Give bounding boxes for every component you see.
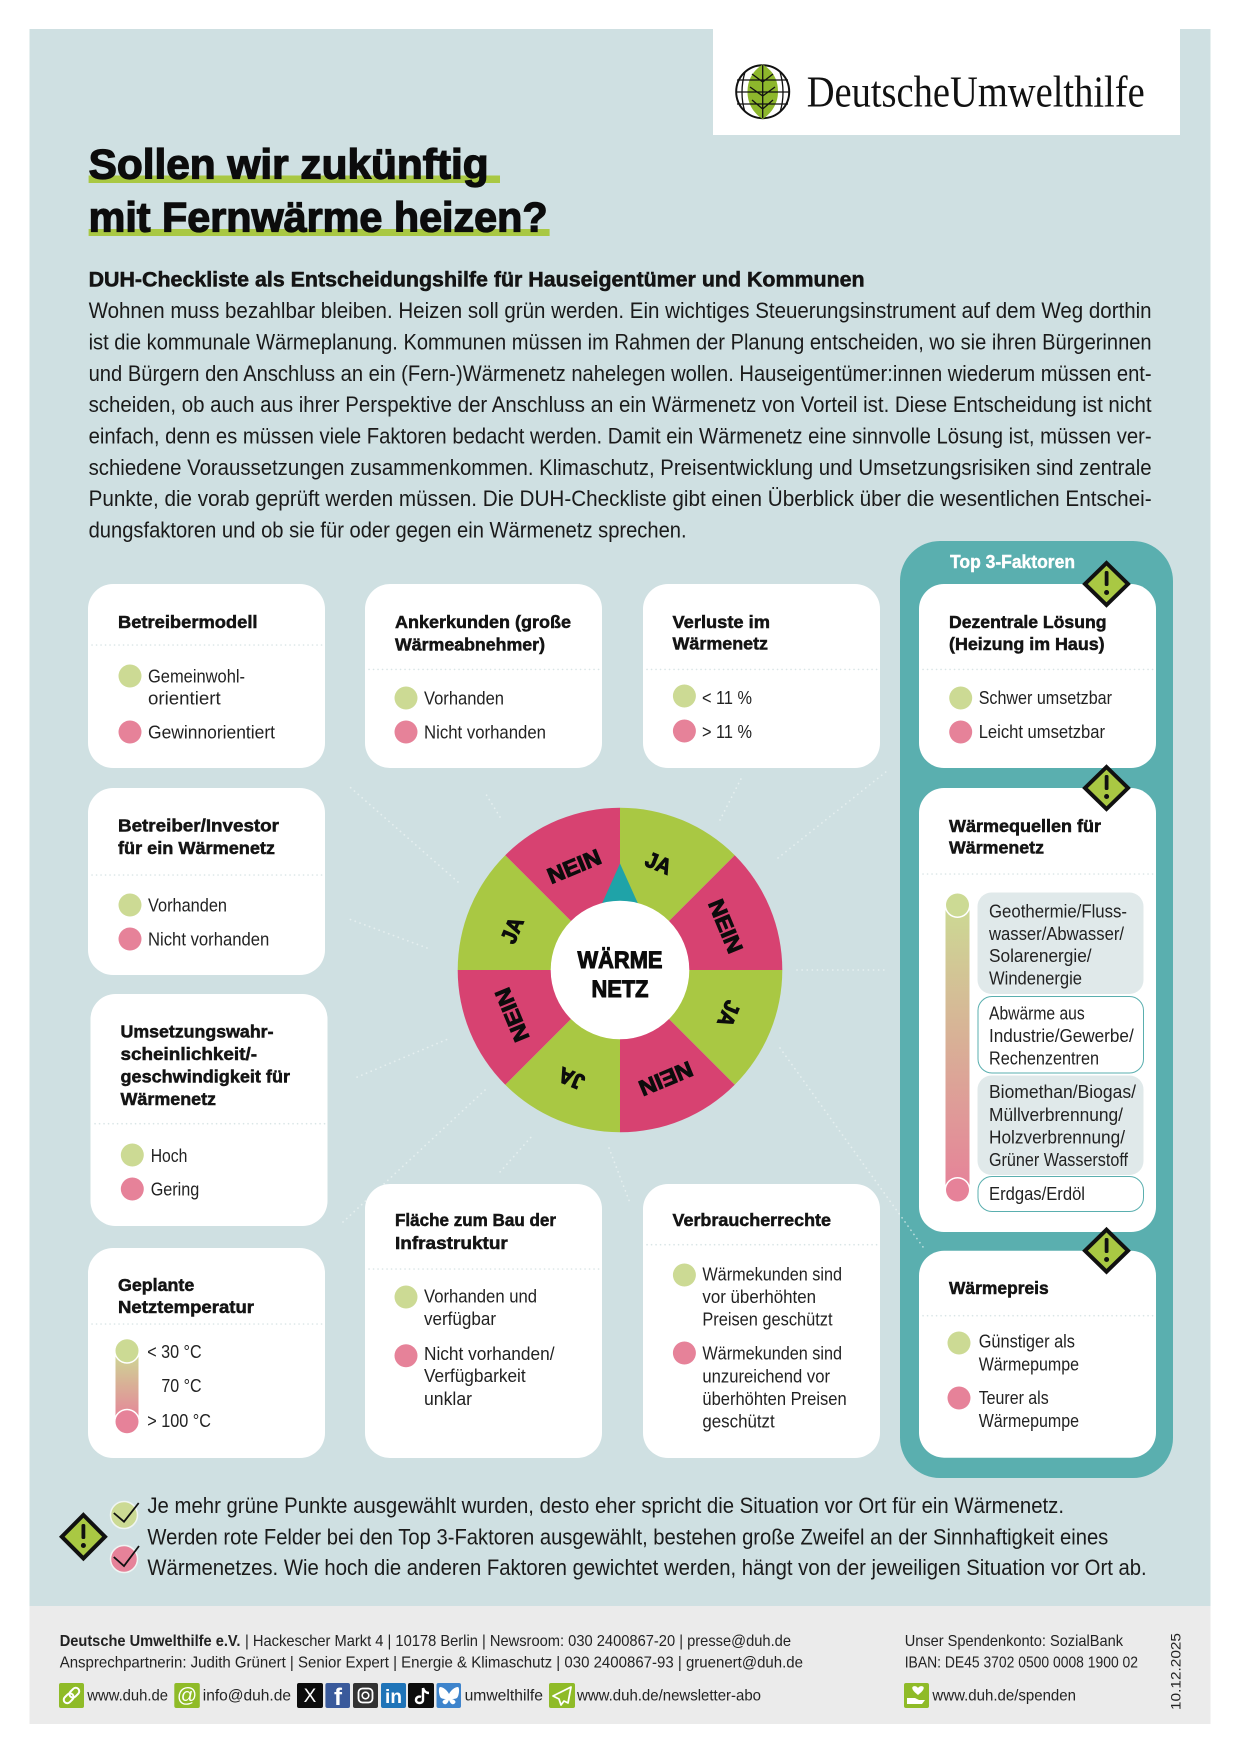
logo: Deutsche Umwelthilfe bbox=[713, 29, 1180, 135]
legend text bbox=[147, 1493, 1147, 1580]
pointer triangle bbox=[600, 864, 640, 908]
option: red: unklar bbox=[424, 1389, 472, 1409]
heading: für ein Wärmenetz bbox=[118, 838, 275, 858]
heading: Verbraucherrechte bbox=[672, 1210, 831, 1230]
logo: Deutsche Umwelthilfe: DeutscheUmwelthilfe bbox=[807, 68, 1145, 117]
heading: Betreibermodell bbox=[118, 612, 258, 632]
icon: link bbox=[59, 1683, 84, 1708]
sector: NEIN bbox=[620, 855, 782, 970]
labels on the wheel: JA bbox=[555, 1062, 588, 1095]
website link: www.duh.de bbox=[86, 1688, 168, 1705]
legend text: Wärmenetzes. Wie hoch die anderen Faktoren gewichtet werden, hängt von der jeweiligen Situation vor Ort ab. bbox=[147, 1555, 1147, 1580]
heading: (Heizung im Haus) bbox=[949, 634, 1105, 654]
source box: renewables: Solarenergie/ bbox=[989, 946, 1092, 966]
option: red: Wärmekunden sind bbox=[702, 1344, 842, 1364]
source box: fossil bbox=[978, 1176, 1144, 1212]
option: green: Schwer umsetzbar bbox=[979, 688, 1112, 708]
icon: Facebook: f bbox=[334, 1684, 343, 1711]
source box: biomass: Grüner Wasserstoff bbox=[989, 1150, 1129, 1170]
intro text: Punkte, die vorab geprüft werden müssen. Die DUH-Checkliste gibt einen Überblick über die wesentlichen Entschei- bbox=[89, 486, 1152, 511]
option: green bbox=[118, 894, 227, 916]
donation text: Unser Spendenkonto: SozialBank bbox=[905, 1633, 1124, 1650]
option: green bbox=[949, 686, 1112, 710]
card: Dezentrale Lösung bbox=[919, 584, 1156, 768]
option: green: Günstiger als bbox=[979, 1332, 1075, 1352]
intro text: und Bürgern den Anschluss an ein (Fern-)Wärmenetz nahelegen wollen. Hauseigentümer:innen wiederum müssen ent- bbox=[89, 361, 1152, 386]
title: Sollen wir zukünftig bbox=[89, 141, 489, 188]
source box: renewables: Geothermie/Fluss- bbox=[989, 902, 1127, 922]
contact text: | Hackescher Markt 4 | 10178 Berlin | Newsroom: 030 2400867-20 | presse@duh.de bbox=[245, 1633, 791, 1650]
heading: Geplante bbox=[118, 1275, 195, 1295]
hub text: WÄRME bbox=[578, 947, 662, 974]
donation link: www.duh.de/spenden bbox=[931, 1688, 1076, 1705]
icon: X bbox=[297, 1683, 323, 1708]
source box: biomass bbox=[978, 1076, 1144, 1175]
heading bbox=[120, 1022, 290, 1109]
option: red: Leicht umsetzbar bbox=[979, 722, 1105, 742]
option: red bbox=[118, 720, 275, 744]
temperature scale: > 100 °C bbox=[147, 1411, 211, 1431]
option: green: orientiert bbox=[148, 688, 221, 708]
source box: waste heat: Rechenzentren bbox=[989, 1048, 1099, 1068]
subheading: DUH-Checkliste als Entscheidungshilfe für Hauseigentümer und Kommunen bbox=[89, 268, 865, 292]
temperature scale: < 30 °C bbox=[147, 1342, 202, 1362]
sector: JA bbox=[458, 855, 620, 970]
social handle: umwelthilfe bbox=[465, 1688, 543, 1705]
hub bbox=[551, 901, 689, 1039]
donation text bbox=[905, 1633, 1138, 1671]
option: red bbox=[394, 1344, 554, 1409]
heading bbox=[949, 612, 1106, 654]
card: Ankerkunden bbox=[365, 584, 602, 768]
intro text bbox=[89, 298, 1152, 542]
heading bbox=[118, 1275, 254, 1317]
intro text: einfach, denn es müssen viele Faktoren bedacht werden. Damit ein Wärmenetz eine sinnvolle Lösung ist, müssen ver- bbox=[89, 424, 1152, 448]
option: green: < 11 % bbox=[702, 688, 752, 708]
icon: warning diamond legend bbox=[62, 1515, 105, 1558]
card: Betreiber/Investor bbox=[88, 788, 325, 975]
labels on the wheel: JA bbox=[712, 997, 745, 1031]
source box: waste heat: Abwärme aus bbox=[989, 1004, 1085, 1024]
card: Verbraucherrechte bbox=[643, 1184, 880, 1458]
option: green bbox=[673, 684, 752, 708]
contact text: Ansprechpartnerin: Judith Grünert | Senior Expert | Energie & Klimaschutz | 030 2400867-93 | gruenert@duh.de bbox=[60, 1654, 803, 1671]
icon: warning diamond 3 bbox=[1085, 1230, 1128, 1272]
icon: LinkedIn: in bbox=[385, 1687, 402, 1708]
option: green bbox=[121, 1144, 187, 1166]
labels on the wheel: NEIN bbox=[703, 896, 748, 957]
heading: Ankerkunden (große bbox=[395, 612, 571, 632]
heading: Umsetzungswahr- bbox=[120, 1022, 274, 1042]
temperature scale bbox=[114, 1338, 211, 1435]
option: green bbox=[394, 1286, 537, 1329]
source box: renewables: wasser/Abwasser/ bbox=[988, 924, 1124, 944]
icon: Instagram bbox=[353, 1683, 378, 1708]
option: red bbox=[118, 928, 269, 950]
sector: JA bbox=[620, 808, 735, 970]
card: Geplante Netztemperatur bbox=[88, 1248, 325, 1458]
source box: waste heat: Industrie/Gewerbe/ bbox=[989, 1026, 1134, 1046]
icon: newsletter bbox=[549, 1683, 575, 1708]
intro text: ist die kommunale Wärmeplanung. Kommunen müssen im Rahmen der Planung entscheiden, wo sie ihren Bürgerinnen bbox=[89, 330, 1152, 354]
card: Betreibermodell bbox=[88, 584, 325, 768]
heading: Verluste im bbox=[672, 612, 770, 632]
title: mit Fernwärme heizen? bbox=[89, 193, 548, 240]
option: red: Teurer als bbox=[979, 1388, 1049, 1408]
option: red: Verfügbarkeit bbox=[424, 1366, 526, 1386]
labels on the wheel: NEIN bbox=[635, 1056, 696, 1101]
source box: renewables: Windenergie bbox=[989, 968, 1082, 988]
intro text: scheiden, ob auch aus ihrer Perspektive der Anschluss an ein Wärmenetz von Vorteil ist. Diese Entscheidung ist nicht bbox=[89, 392, 1152, 417]
icon: green check bbox=[110, 1502, 139, 1528]
option: red bbox=[394, 720, 546, 744]
option: red: Gewinnorientiert bbox=[148, 722, 275, 742]
option: red: geschützt bbox=[702, 1412, 775, 1432]
labels on the wheel: NEIN bbox=[490, 984, 534, 1045]
heading: Fläche zum Bau der bbox=[395, 1210, 556, 1230]
heading: Netztemperatur bbox=[118, 1297, 254, 1317]
sector: JA bbox=[505, 970, 620, 1132]
sector: JA bbox=[620, 970, 782, 1085]
icon: donation heart bbox=[904, 1683, 929, 1708]
icon: Facebook bbox=[325, 1683, 350, 1711]
dotted connector rays bbox=[343, 771, 923, 1247]
option: green bbox=[394, 686, 504, 710]
card: Wärmequellen bbox=[919, 788, 1156, 1232]
email link: info@duh.de bbox=[203, 1688, 291, 1705]
option: red bbox=[673, 1342, 847, 1432]
option: green: Vorhanden bbox=[424, 688, 504, 708]
heading: Wärmenetz bbox=[120, 1089, 216, 1109]
option: green: Gemeinwohl- bbox=[148, 666, 245, 686]
heading: Betreiber/Investor bbox=[118, 815, 279, 835]
icon: warning diamond 2 bbox=[1085, 767, 1128, 809]
option: red: Nicht vorhanden bbox=[424, 722, 546, 742]
wheel: Wärmenetz bbox=[458, 808, 782, 1132]
option: red: Nicht vorhanden/ bbox=[424, 1344, 554, 1364]
card: Umsetzungswahrscheinlichkeit bbox=[90, 994, 328, 1226]
intro text: Wohnen muss bezahlbar bleiben. Heizen soll grün werden. Ein wichtiges Steuerungsinstrument auf dem Weg dorthin bbox=[89, 298, 1152, 323]
option: green: Preisen geschützt bbox=[702, 1310, 832, 1330]
legend text: Werden rote Felder bei den Top 3-Faktoren ausgewählt, bestehen große Zweifel an der Sinnhaftigkeit eines bbox=[147, 1524, 1108, 1549]
option: red bbox=[121, 1178, 199, 1200]
card: Fläche zum Bau bbox=[365, 1184, 602, 1458]
option: red bbox=[949, 720, 1105, 744]
source box: renewables bbox=[978, 892, 1144, 994]
option: red bbox=[673, 720, 752, 742]
heading: Wärmenetz bbox=[949, 838, 1044, 858]
contact text bbox=[60, 1633, 803, 1671]
option: red: unzureichend vor bbox=[702, 1366, 830, 1386]
heading: scheinlichkeit/- bbox=[120, 1044, 257, 1064]
option: green bbox=[118, 664, 245, 708]
heading: Infrastruktur bbox=[395, 1233, 508, 1253]
option: green: Vorhanden bbox=[148, 895, 227, 915]
option: red: überhöhten Preisen bbox=[702, 1389, 847, 1409]
sector: NEIN bbox=[458, 970, 620, 1085]
option: red bbox=[948, 1386, 1079, 1431]
icon: warning diamond 1 bbox=[1085, 563, 1128, 605]
icon: red check bbox=[110, 1546, 139, 1572]
heading bbox=[672, 612, 770, 654]
icon: Bluesky bbox=[436, 1683, 461, 1708]
heading bbox=[395, 1210, 556, 1253]
legend text: Je mehr grüne Punkte ausgewählt wurden, desto eher spricht die Situation vor Ort für ein Wärmenetz. bbox=[147, 1493, 1064, 1518]
option: green: verfügbar bbox=[424, 1309, 496, 1329]
option: green: Vorhanden und bbox=[424, 1286, 537, 1306]
option: green: Wärmepumpe bbox=[979, 1355, 1079, 1375]
labels on the wheel: JA bbox=[642, 847, 675, 880]
labels on the wheel: JA bbox=[496, 913, 529, 947]
icon: at: @ bbox=[177, 1685, 197, 1707]
heading bbox=[118, 815, 279, 858]
intro text: dungsfaktoren und ob sie für oder gegen ein Wärmenetz sprechen. bbox=[89, 518, 687, 542]
option: green: vor überhöhten bbox=[702, 1287, 816, 1307]
sector: NEIN bbox=[620, 970, 735, 1132]
option: green bbox=[948, 1332, 1079, 1375]
option: red: > 11 % bbox=[702, 722, 752, 742]
temperature scale: 70 °C bbox=[161, 1376, 202, 1396]
source box: biomass: Müllverbrennung/ bbox=[989, 1105, 1123, 1125]
option: red: Gering bbox=[151, 1180, 199, 1200]
source box: waste heat bbox=[978, 996, 1144, 1073]
heading: Dezentrale Lösung bbox=[949, 612, 1106, 632]
labels on the wheel: NEIN bbox=[544, 844, 605, 889]
option: red: Nicht vorhanden bbox=[148, 930, 269, 950]
option: green: Hoch bbox=[151, 1146, 187, 1166]
heading bbox=[395, 612, 571, 655]
card: Verluste im Wärmenetz bbox=[643, 584, 880, 768]
heading bbox=[949, 816, 1101, 858]
source box: biomass: Biomethan/Biogas/ bbox=[989, 1082, 1136, 1102]
heading: Wärmeabnehmer) bbox=[395, 635, 545, 655]
card: Wärmepreis bbox=[919, 1251, 1156, 1458]
option: green bbox=[673, 1264, 842, 1330]
heading: Wärmepreis bbox=[949, 1278, 1049, 1298]
source scale bbox=[944, 892, 970, 1203]
title bbox=[89, 141, 550, 240]
labels on the wheel bbox=[490, 844, 748, 1101]
heading: Wärmequellen für bbox=[949, 816, 1101, 836]
footer bbox=[30, 1606, 1210, 1724]
source box: biomass: Holzverbrennung/ bbox=[989, 1128, 1125, 1148]
heading: geschwindigkeit für bbox=[120, 1066, 290, 1086]
panel: top 3 factors background bbox=[900, 541, 1173, 1478]
icon: LinkedIn bbox=[381, 1683, 406, 1708]
heading: Wärmenetz bbox=[672, 634, 768, 654]
option: green: Wärmekunden sind bbox=[702, 1264, 842, 1284]
hub text bbox=[578, 947, 662, 1003]
donation text: IBAN: DE45 3702 0500 0008 1900 02 bbox=[905, 1654, 1138, 1671]
panel: top 3 factors background: Top 3-Faktoren bbox=[950, 552, 1075, 572]
contact text: Deutsche Umwelthilfe e.V. bbox=[60, 1633, 240, 1650]
sector: NEIN bbox=[505, 808, 620, 970]
date: 10.12.2025 bbox=[1168, 1633, 1184, 1710]
intro text: schiedene Voraussetzungen zusammenkommen. Klimaschutz, Preisentwicklung und Umsetzungsrisiken sind zentrale bbox=[89, 455, 1152, 480]
option: red: Wärmepumpe bbox=[979, 1411, 1079, 1431]
hub text: NETZ bbox=[592, 976, 648, 1003]
newsletter link: www.duh.de/newsletter-abo bbox=[576, 1688, 761, 1705]
icon: X: X bbox=[304, 1686, 317, 1707]
source box: fossil: Erdgas/Erdöl bbox=[989, 1184, 1085, 1204]
icon: TikTok bbox=[408, 1683, 434, 1708]
